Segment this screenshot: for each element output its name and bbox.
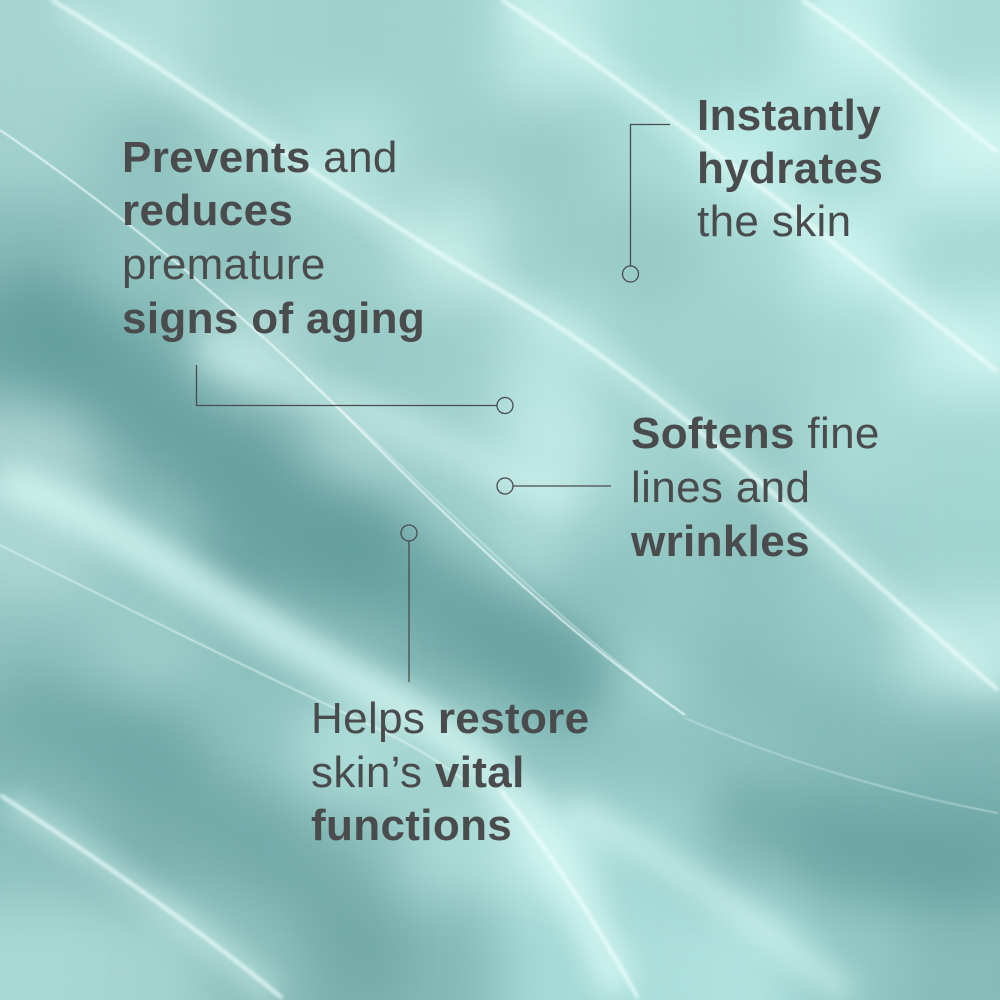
- leader line and dot: softens: [497, 478, 611, 494]
- text: softens fine lines and wrinkles: lines and: [631, 463, 810, 512]
- dark gel shadows: [0, 295, 1000, 990]
- callout: prevents and reduces: [122, 133, 513, 414]
- text: prevents and reduces premature signs of aging: premature: [122, 240, 326, 289]
- text: softens fine lines and wrinkles: Softens fine: [631, 409, 880, 458]
- leader line and dot: restore: [401, 525, 417, 682]
- text: helps restore skin's vital functions: Helps restore: [311, 694, 589, 743]
- callout: helps restore: [311, 525, 602, 850]
- text: instantly hydrates the skin: the skin: [697, 197, 851, 246]
- text: helps restore skin's vital functions: skin’s vital: [311, 748, 525, 797]
- leader line and dot: prevents: [196, 365, 513, 414]
- text: prevents and reduces premature signs of aging: Prevents and: [122, 133, 398, 182]
- callout: instantly hydrates: [622, 91, 896, 282]
- text: prevents and reduces premature signs of aging: reduces: [122, 186, 293, 235]
- text: prevents and reduces premature signs of aging: signs of aging: [122, 294, 425, 343]
- text: instantly hydrates the skin: Instantly: [697, 91, 881, 140]
- text: helps restore skin's vital functions: functions: [311, 801, 512, 850]
- text: instantly hydrates the skin: hydrates: [697, 144, 883, 193]
- leader line and dot: hydrates: [622, 124, 670, 282]
- text: softens fine lines and wrinkles: wrinkles: [630, 517, 810, 566]
- callout: softens fine lines: [497, 409, 892, 566]
